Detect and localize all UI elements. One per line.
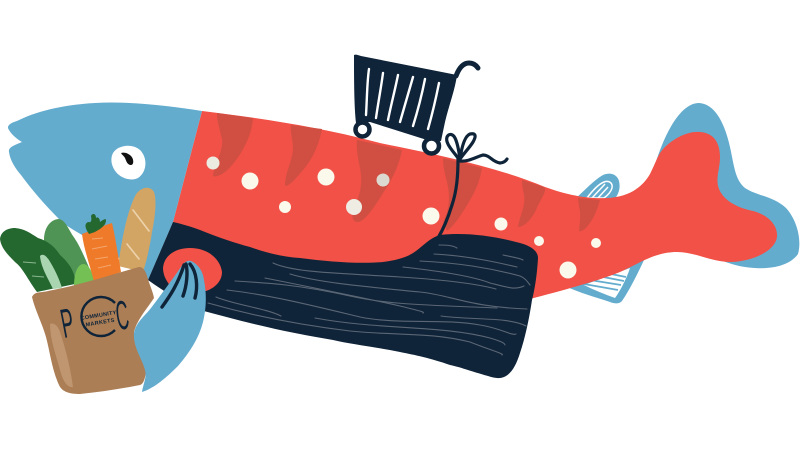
dark green leaf: [0, 228, 75, 292]
fish body: red: [150, 111, 777, 320]
logo: PCC COMMUNITY MARKETS: C: [113, 292, 132, 339]
shopping cart: [354, 55, 478, 154]
dots on the side: [206, 156, 601, 278]
logo: PCC COMMUNITY MARKETS: MARKETS: [85, 318, 115, 328]
fin: lower small fin: [565, 258, 645, 303]
light green leaf: [44, 219, 90, 284]
baguette: [118, 188, 155, 272]
red gill patch: [163, 248, 222, 291]
tail: blue outer: [655, 103, 799, 268]
fish head: blue: [8, 103, 202, 280]
darker stripes on back: [213, 113, 600, 231]
fin: upper small fin: [574, 174, 620, 202]
lime vegetable: [74, 264, 95, 286]
carrot: [82, 214, 121, 282]
pectoral fin: blue hand holding bag: [134, 261, 206, 392]
logo: PCC COMMUNITY MARKETS: COMMUNITY: [80, 310, 117, 322]
ribbon bow and string: [438, 134, 507, 238]
fish belly: navy with grain lines: [148, 222, 538, 378]
pale leaf stem: [40, 255, 62, 289]
logo: PCC COMMUNITY MARKETS: [57, 292, 132, 347]
logo: PCC COMMUNITY MARKETS: P: [57, 299, 78, 347]
eye: [111, 146, 145, 179]
paper bag with PCC logo: [32, 267, 154, 394]
